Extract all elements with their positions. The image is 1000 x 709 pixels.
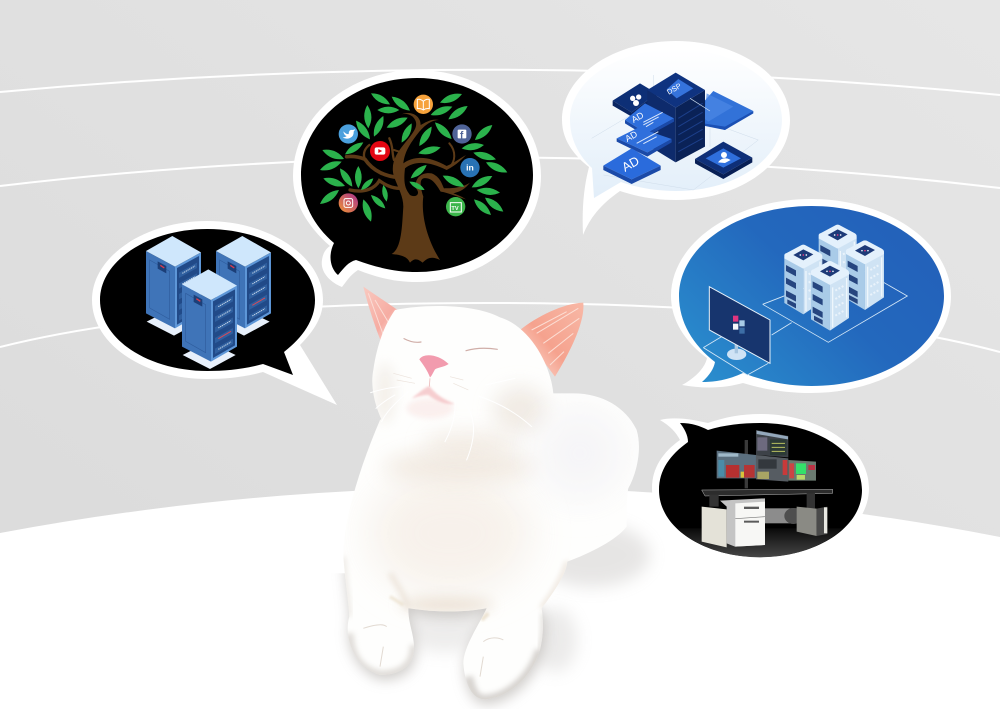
bubble fill bbox=[679, 206, 944, 386]
server tower: DSP bbox=[665, 81, 683, 96]
server rack bbox=[819, 225, 857, 294]
filing cabinet bbox=[720, 498, 765, 547]
card: AD 2: AD bbox=[623, 129, 640, 144]
bubble: servers bbox=[92, 221, 337, 405]
side panel bbox=[702, 507, 727, 547]
monitor right bbox=[788, 460, 816, 481]
tree trunk bbox=[392, 113, 470, 263]
desk top bbox=[702, 489, 833, 496]
computer tower bbox=[797, 507, 827, 536]
cat soft shading bbox=[343, 363, 623, 699]
card: user bbox=[695, 142, 752, 179]
white cat bbox=[343, 287, 639, 704]
card: right blue bbox=[703, 91, 753, 130]
cat whiskers bbox=[371, 378, 532, 460]
cat ear left bbox=[363, 287, 405, 343]
cat paw contact shadow bbox=[345, 561, 544, 704]
card: people bbox=[613, 83, 657, 117]
bubble fill bbox=[100, 229, 315, 375]
tree leaves bbox=[320, 93, 507, 222]
icon: facebook bbox=[452, 124, 472, 144]
bubble outline bbox=[293, 70, 541, 287]
trading desk illustration bbox=[678, 430, 842, 558]
cat nose bbox=[419, 355, 449, 377]
card: AD 2 bbox=[617, 128, 672, 157]
desk legs bbox=[709, 493, 815, 508]
icon: tv: TV bbox=[451, 206, 459, 212]
monitor top bbox=[756, 430, 788, 457]
bubble: trading desk bbox=[652, 414, 869, 563]
cat paw toes bbox=[363, 625, 503, 677]
cat silhouette bbox=[343, 306, 639, 699]
bubble: DSP ad server bbox=[562, 41, 790, 235]
cat muzzle hair bbox=[393, 373, 468, 390]
card: AD 3 bbox=[603, 148, 661, 184]
platform grid lines bbox=[592, 75, 758, 190]
bubble: cloud data center bbox=[671, 199, 951, 393]
bubble fill bbox=[301, 78, 533, 275]
desk beam bbox=[765, 508, 802, 524]
icon: youtube bbox=[370, 141, 390, 161]
bubble outline bbox=[652, 414, 869, 563]
server tower bbox=[647, 73, 710, 162]
icon: instagram bbox=[339, 193, 358, 213]
icon: tv bbox=[446, 197, 465, 216]
server rack bbox=[846, 240, 884, 310]
card: AD 1: AD bbox=[630, 110, 646, 125]
network floor lines bbox=[703, 265, 907, 375]
card: AD 3: AD bbox=[620, 154, 642, 175]
arc lines bbox=[0, 70, 1000, 352]
bubble outline bbox=[562, 41, 790, 235]
icon: facebook: f bbox=[460, 131, 464, 142]
floor bbox=[678, 528, 842, 558]
bubble outline bbox=[671, 199, 951, 393]
white floor bbox=[0, 487, 1000, 709]
server rack bbox=[784, 245, 822, 314]
bubble fill bbox=[659, 423, 862, 557]
monitor bbox=[709, 287, 770, 363]
tree bbox=[320, 93, 507, 263]
cat mouth bbox=[412, 386, 455, 404]
monitor center bbox=[756, 455, 788, 482]
icon: book bbox=[414, 95, 433, 114]
icon: linkedin: in bbox=[466, 163, 474, 173]
icon: linkedin bbox=[460, 158, 480, 177]
cat ear right bbox=[520, 303, 583, 377]
DSP illustration bbox=[592, 73, 758, 190]
bubble fill bbox=[570, 49, 782, 198]
bubble: social media tree bbox=[293, 70, 541, 287]
card: AD 1 bbox=[625, 103, 674, 137]
server racks bbox=[146, 236, 271, 369]
server rack bbox=[811, 261, 849, 331]
monitor left bbox=[717, 451, 756, 478]
icon: twitter bbox=[339, 124, 358, 144]
data center illustration bbox=[703, 225, 907, 375]
bubble outline bbox=[92, 221, 337, 405]
monitor stand bbox=[745, 440, 748, 488]
cat eyes bbox=[404, 339, 497, 351]
cat floor shadow bbox=[400, 523, 650, 672]
tree branches bbox=[347, 138, 454, 191]
